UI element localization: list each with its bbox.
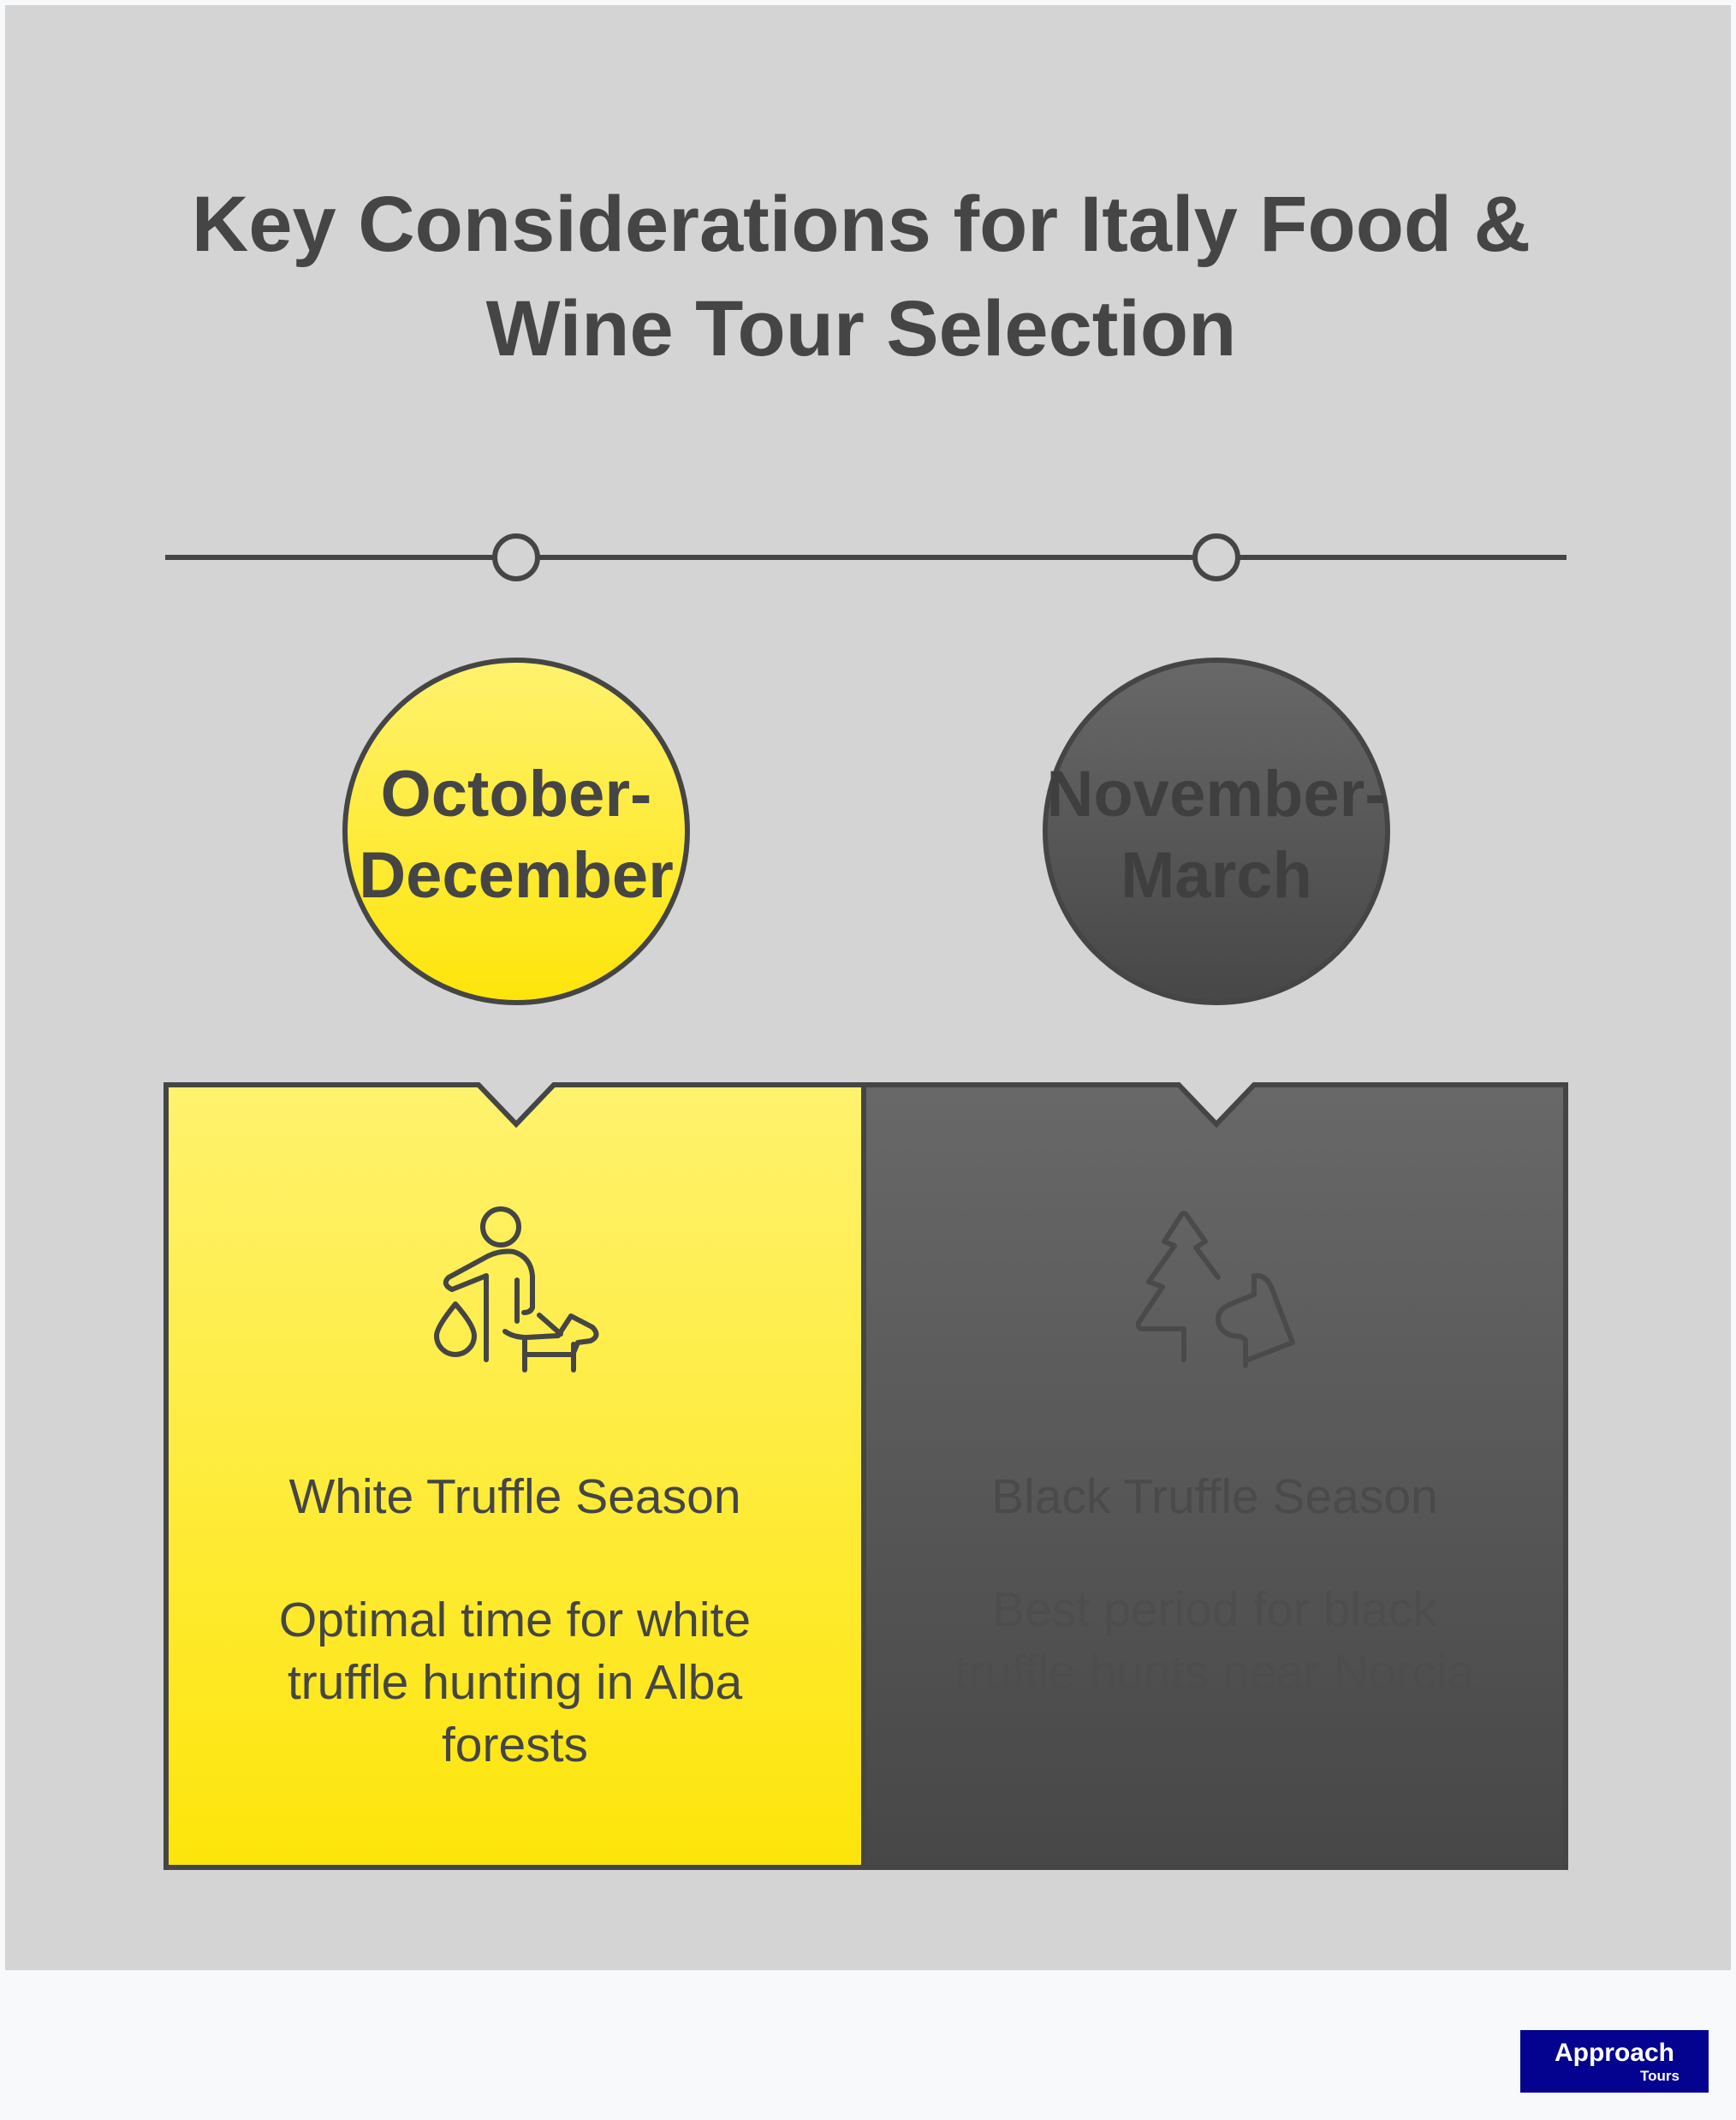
text: black truffle season: Black Truffle Season <box>991 1469 1438 1524</box>
circle text: October-December: October- <box>381 758 651 831</box>
circle: October-December <box>345 660 687 1003</box>
icon: man with dog and truffle <box>434 1206 599 1373</box>
title: Wine Tour Selection <box>486 285 1236 372</box>
text: white truffle description: forests <box>442 1718 588 1772</box>
circle text: October-December: December <box>359 839 674 912</box>
text: black truffle description: Best period for black <box>992 1582 1437 1637</box>
logo: Approach Tours <box>1520 2030 1709 2093</box>
circle text: November-March <box>1046 758 1387 912</box>
text: white truffle description: Optimal time for white <box>279 1593 751 1647</box>
logo: Approach Tours: Tours <box>1640 2068 1680 2084</box>
text: white truffle season: White Truffle Season <box>288 1469 741 1524</box>
text: black truffle description <box>864 1579 1566 1704</box>
logo: Approach Tours: Approach <box>1555 2039 1674 2067</box>
box: black truffle <box>864 1085 1566 1867</box>
box: white truffle <box>166 1085 864 1867</box>
title: Key Considerations for Italy Food & <box>192 181 1531 268</box>
text: white truffle description <box>279 1593 751 1772</box>
text: white truffle description: truffle hunting in Alba <box>288 1655 742 1710</box>
circle text: November-March: March <box>1121 839 1312 912</box>
circle text: November-March: November- <box>1046 758 1387 831</box>
circle text: October-December <box>359 758 674 912</box>
text: black truffle description: truffle hunts near Norcia <box>954 1645 1475 1700</box>
circle: November-March <box>1045 660 1388 1003</box>
title <box>192 181 1531 372</box>
icon: tree and dog head <box>1136 1211 1295 1368</box>
